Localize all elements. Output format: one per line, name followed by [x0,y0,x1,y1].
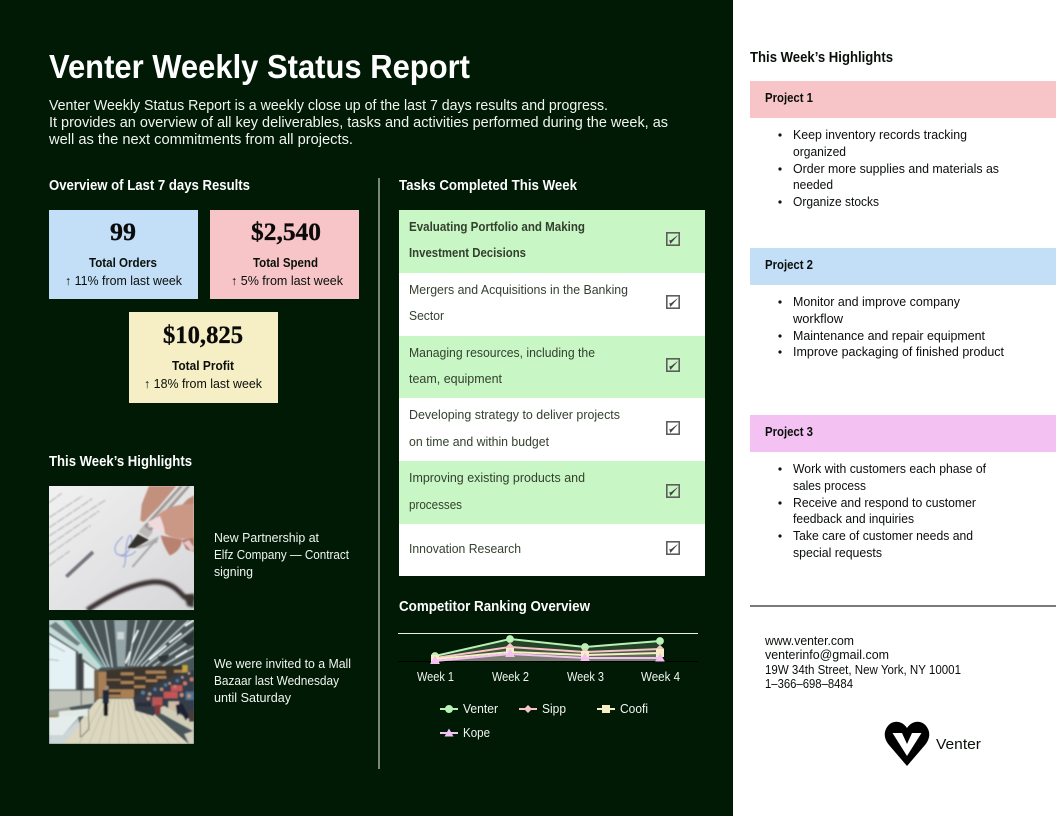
panel: total spend card: $2,540 [251,219,321,246]
panel: total profit card: Total Profit [172,359,235,373]
panel: total orders card: ↑ 11% from last week [65,274,183,288]
column divider [378,178,380,769]
task row 1: Investment Decisions [409,246,526,260]
legend: Kope: Kope [463,726,490,740]
contact details [764,634,961,691]
panel: project 1: Keep inventory records tracking [793,128,967,142]
image: conference hall photo [49,620,194,744]
axis labels: Week 2 [492,670,529,684]
panel: project 1: needed [793,178,833,192]
intro text block [48,98,668,148]
highlight caption 1: New Partnership at [214,531,320,545]
legend: Coofi [597,702,648,716]
heading: overview: Overview of Last 7 days Results [49,178,250,194]
legend: Kope [440,726,490,740]
legend: Coofi: Coofi [620,702,648,716]
panel: project 1: Project 1 [765,91,813,105]
highlight caption 2: We were invited to a Mall [214,657,351,671]
contact details: www.venter.com [764,634,854,648]
legend: Sipp [519,702,566,716]
panel: project 1: organized [793,145,846,159]
task row 1: Evaluating Portfolio and Making [409,220,585,234]
panel: total profit card: $10,825 [163,322,243,349]
task row 2: Sector [409,309,444,323]
panel: project 3: Work with customers each phase of [793,462,987,476]
legend: Sipp: Sipp [542,702,566,716]
panel: project 3: Receive and respond to customer [793,496,976,510]
screens [49,633,78,691]
intro text block: well as the next commitments from all projects. [48,132,353,148]
panel: total orders card [49,210,198,299]
line chart: competitor ranking [398,633,698,684]
task row 5 [399,461,705,524]
panel: project 2 [750,248,1056,359]
panel: total profit card [129,312,278,403]
panel: project 3: special requests [793,546,882,560]
contact details: venterinfo@gmail.com [765,648,889,662]
panel: project 2: Monitor and improve company [793,295,961,309]
contact details: 1–366–698–8484 [765,677,853,691]
panel: project 1: Order more supplies and materials as [793,162,999,176]
panel: total orders card: Total Orders [89,256,157,270]
panel: project 2: Maintenance and repair equipment [793,329,986,343]
left wall upper [49,620,102,670]
highlight caption 1: Elfz Company — Contract [214,548,349,562]
panel: project 3: Take care of customer needs and [793,529,973,543]
tiers [161,706,194,732]
panel: total profit card: ↑ 18% from last week [144,377,263,391]
panel: project 3: Project 3 [765,425,813,439]
heading: sidebar highlights: This Week’s Highlights [750,50,893,66]
task row 3 [399,336,705,398]
wall panels under screens [49,691,94,711]
logo: Venter heart mark: Venter [936,736,981,753]
task row 2 [399,273,705,336]
axis labels: Week 1 [417,670,454,684]
panel: project 1 [750,81,1056,209]
intro text block: Venter Weekly Status Report is a weekly close up of the last 7 days results and progress. [49,98,608,114]
task row 6: Innovation Research [409,542,521,556]
chart legend [440,702,648,740]
floor [62,699,189,744]
heading: competitor ranking: Competitor Ranking Overview [399,599,591,615]
image: contract signing photo [49,486,194,610]
panel: project 1: Organize stocks [793,195,879,209]
logo: Venter heart mark [885,722,981,766]
panel: project 2: workflow [792,312,844,326]
axis labels [417,670,680,684]
task row 4: Developing strategy to deliver projects [409,408,620,422]
sidebar divider [750,605,1056,607]
series: Sipp [432,644,664,662]
contact details: 19W 34th Street, New York, NY 10001 [765,663,961,677]
intro text block: It provides an overview of all key deliverables, tasks and activities performed during the week, as [49,115,668,131]
axis labels: Week 3 [567,670,604,684]
panel: project 2: Improve packaging of finished product [793,345,1005,359]
heading: tasks: Tasks Completed This Week [399,178,578,194]
ceiling slats [66,620,194,667]
panel: project 3: feedback and inquiries [793,512,914,526]
legend: Venter [440,702,498,716]
highlight caption 2: Bazaar last Wednesday [214,674,340,688]
task row 5: processes [409,498,462,512]
task row 3: team, equipment [409,372,503,386]
panel: total orders card: 99 [110,219,136,246]
audience [133,670,194,720]
panel: dark main background [0,0,733,816]
panel: total spend card [210,210,359,299]
panel: project 3 [750,415,1056,560]
task row 6 [399,524,705,576]
series: Venter [432,636,663,659]
tasks table [399,210,705,576]
panel: white sidebar [733,0,1056,816]
task row 4 [399,398,705,461]
highlight caption 2 [214,657,351,705]
legend: Venter: Venter [463,702,498,716]
task row 1 [399,210,705,273]
panel: total spend card: Total Spend [253,256,318,270]
panel: project 3: sales process [793,479,866,493]
axis labels: Week 4 [641,670,680,684]
title: Venter Weekly Status Report [49,48,470,85]
highlight caption 2: until Saturday [214,691,292,705]
highlight caption 1 [214,531,349,579]
speaker [103,690,109,703]
task row 3: Managing resources, including the [409,346,595,360]
highlight caption 1: signing [214,565,253,579]
back wall [97,665,186,700]
desks [59,708,89,717]
panel: project 2: Project 2 [765,258,813,272]
task row 5: Improving existing products and [409,471,585,485]
panel: total spend card: ↑ 5% from last week [231,274,344,288]
series: Coofi [431,648,664,663]
task row 4: on time and within budget [409,435,550,449]
heading: highlights left: This Week’s Highlights [49,454,192,470]
task row 2: Mergers and Acquisitions in the Banking [409,283,628,297]
series: Kope [431,650,664,664]
